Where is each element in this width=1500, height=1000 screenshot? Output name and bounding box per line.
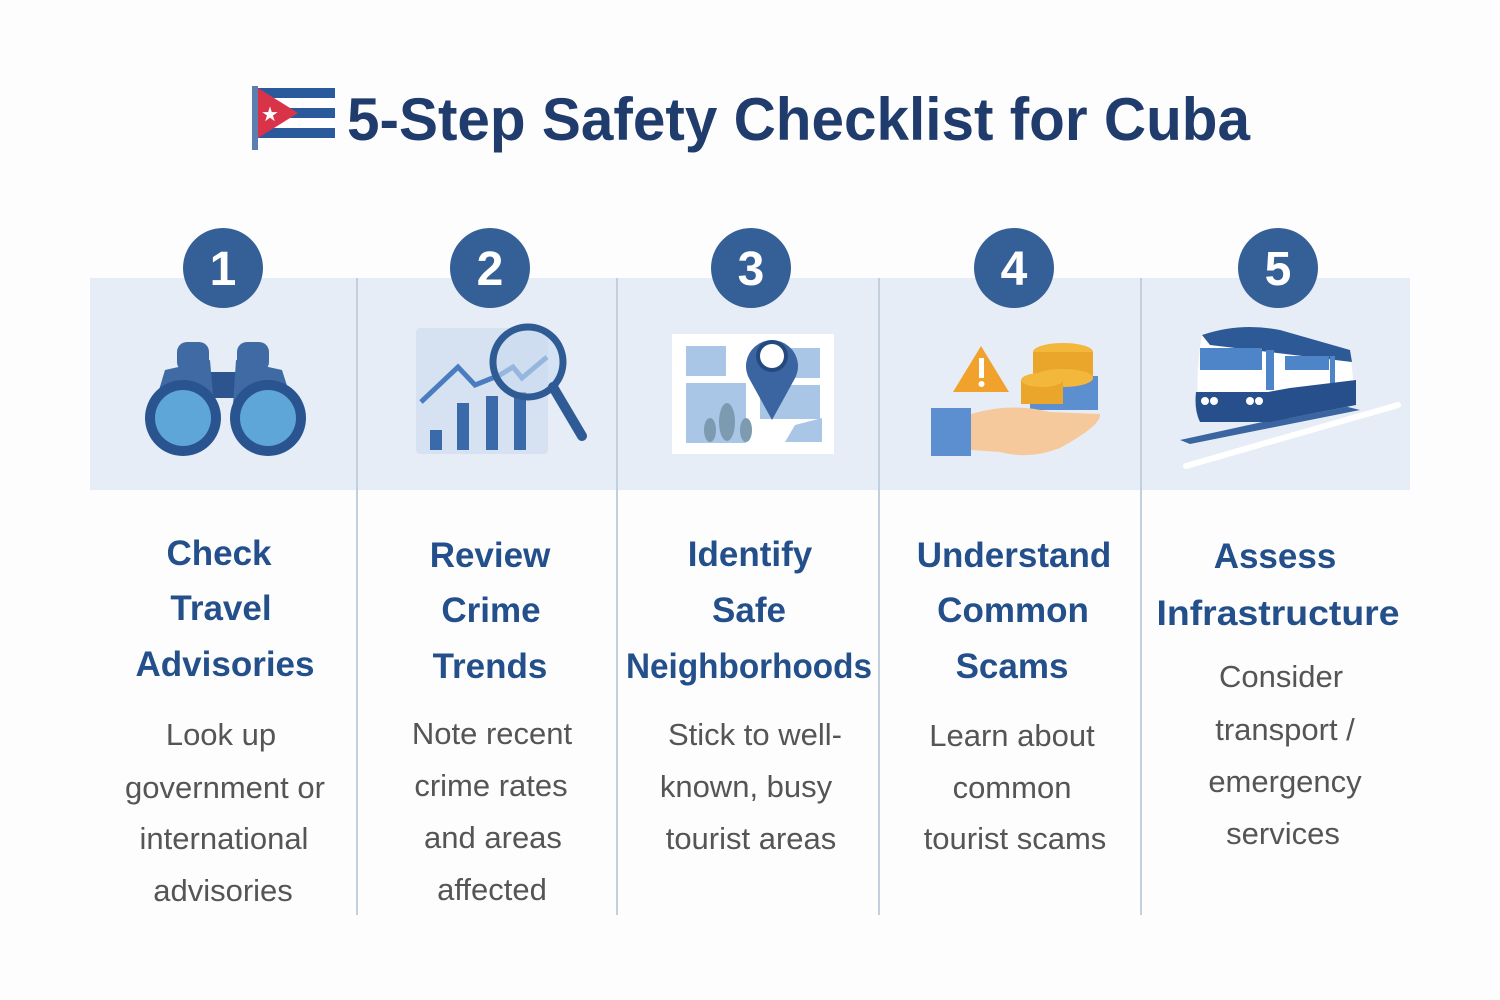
body 5 xyxy=(1208,659,1362,851)
body 5: Consider xyxy=(1219,659,1343,694)
number badge 4 xyxy=(974,228,1054,308)
body 2: Note recent xyxy=(412,716,573,751)
step 2 xyxy=(412,228,582,907)
body 5: emergency xyxy=(1208,764,1362,799)
body 1: Look up xyxy=(166,717,276,752)
number badge 3 xyxy=(711,228,791,308)
body 4: common xyxy=(953,770,1071,805)
heading 1: Travel xyxy=(170,589,272,628)
icon: hand with coins and warning xyxy=(931,343,1100,456)
icon: cuba flag: ★ xyxy=(261,104,279,126)
heading 2: Review xyxy=(430,536,551,575)
icon: cuba flag xyxy=(252,86,335,150)
heading 3: Neighborhoods xyxy=(626,647,872,686)
heading 5: Assess xyxy=(1214,537,1336,576)
icon: chart with magnifier xyxy=(416,327,582,454)
heading 5: Infrastructure xyxy=(1156,594,1400,633)
number badge 5: 5 xyxy=(1265,243,1291,296)
heading 3: Safe xyxy=(712,591,786,630)
body 2: and areas xyxy=(424,820,562,855)
number badge 2 xyxy=(450,228,530,308)
heading 1: Check xyxy=(166,534,272,573)
number badge 1 xyxy=(183,228,263,308)
heading 2: Crime xyxy=(441,591,541,630)
body 4: Learn about xyxy=(929,718,1095,753)
body 4: tourist scams xyxy=(924,821,1106,856)
heading 3 xyxy=(626,535,872,686)
body 1 xyxy=(125,717,325,908)
step 1 xyxy=(125,228,325,908)
body 5: transport / xyxy=(1215,712,1355,747)
number badge 4: 4 xyxy=(1001,243,1028,296)
heading 3: Identify xyxy=(688,535,813,574)
panel band xyxy=(90,278,1410,490)
body 1: international xyxy=(140,821,308,856)
heading 2: Trends xyxy=(433,647,547,686)
number badge 5 xyxy=(1238,228,1318,308)
icon: train xyxy=(1180,327,1398,466)
body 3 xyxy=(660,717,842,856)
heading 5 xyxy=(1156,537,1400,633)
body 2: affected xyxy=(437,872,547,907)
heading 4: Scams xyxy=(956,647,1068,686)
heading 1: Advisories xyxy=(136,645,314,684)
body 1: advisories xyxy=(153,873,293,908)
step 4 xyxy=(917,228,1111,856)
number badge 3: 3 xyxy=(738,243,764,296)
body 2 xyxy=(412,716,573,907)
heading 4: Understand xyxy=(917,536,1111,575)
title: 5-Step Safety Checklist for Cuba xyxy=(347,86,1251,153)
body 1: government or xyxy=(125,770,325,805)
number badge 1: 1 xyxy=(210,243,236,296)
icon: binoculars xyxy=(145,342,306,456)
number badge 2: 2 xyxy=(477,243,503,296)
icon: map with pin xyxy=(672,334,834,454)
body 3: tourist areas xyxy=(666,821,836,856)
step 3 xyxy=(626,228,872,856)
body 4 xyxy=(924,718,1106,856)
heading 4 xyxy=(917,536,1111,686)
heading 1 xyxy=(136,534,314,684)
body 3: known, busy xyxy=(660,769,833,804)
body 3: Stick to well- xyxy=(668,717,842,752)
step 5 xyxy=(1156,228,1400,851)
heading 4: Common xyxy=(937,591,1089,630)
heading 2 xyxy=(430,536,551,686)
body 5: services xyxy=(1226,816,1340,851)
body 2: crime rates xyxy=(414,768,568,803)
